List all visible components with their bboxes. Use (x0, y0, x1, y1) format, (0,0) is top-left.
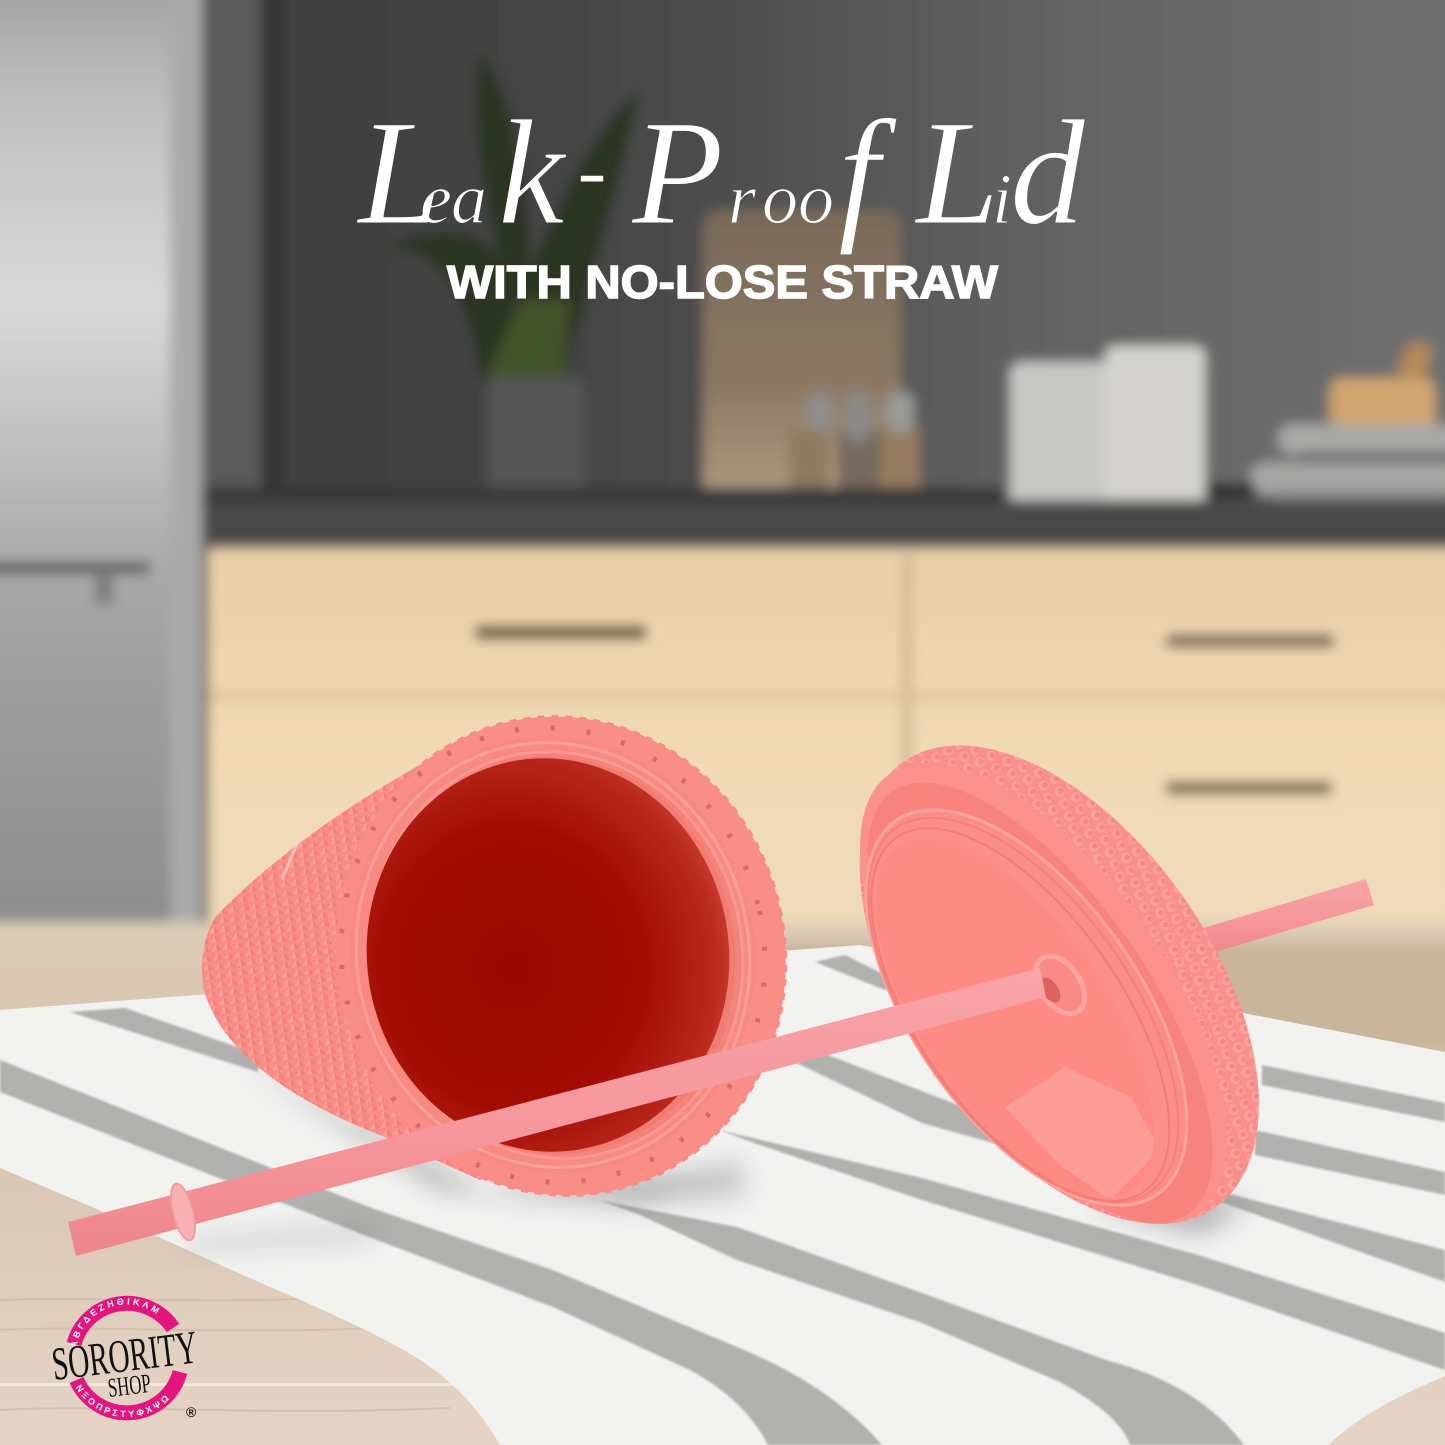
Sorority Shop logo (49, 1296, 200, 1420)
straw (68, 968, 1046, 1256)
straw collar (166, 1181, 200, 1243)
straw boss (1025, 947, 1095, 1023)
spice jars (790, 392, 920, 500)
title script: - (577, 121, 607, 220)
cup body with stud texture (202, 724, 700, 1180)
lid inner face (823, 795, 1207, 1241)
title script: L (356, 90, 441, 256)
greek letters top: ΑΒΓΔΕΖΗΘΙΚΛΜ (70, 1298, 160, 1346)
title script: k (498, 90, 567, 256)
mortar (1395, 342, 1432, 380)
title script: r (728, 159, 757, 239)
title script: o (762, 159, 798, 239)
table edge and wood grain (0, 1298, 490, 1411)
subtitle: WITH NO-LOSE STRAW (447, 256, 999, 308)
title script: e (420, 159, 452, 239)
tumbler cup (202, 675, 830, 1237)
rim dots (299, 688, 807, 1222)
Sorority Shop logo: SHOP (106, 1368, 152, 1403)
threads (803, 756, 1250, 1259)
title script: d (1010, 90, 1086, 256)
table (0, 922, 1445, 1445)
knurled outer band (779, 675, 1340, 1295)
cup interior (341, 735, 755, 1175)
light patch on lid face (1005, 1067, 1160, 1200)
straw hole (1035, 974, 1065, 1006)
wall (200, 0, 1445, 510)
gray stripes (0, 955, 1445, 1445)
greek letters bottom: ΝΞΟΠΡΣΤΥΦΧΨΩ (76, 1384, 170, 1417)
cutting board (703, 210, 901, 500)
cup rim (292, 675, 830, 1237)
counter (204, 500, 1445, 550)
faint logo on cup (282, 820, 310, 880)
logo ring (74, 1303, 173, 1344)
fridge (0, 0, 172, 925)
logo wordmark: SORORITY (49, 1322, 200, 1391)
striped tablecloth (0, 945, 1445, 1445)
lid (860, 746, 1259, 1224)
straw far end (1197, 879, 1374, 955)
lid rim (790, 704, 1297, 1283)
cabinet (208, 548, 1445, 948)
title script: o (798, 159, 834, 239)
title script: i (992, 159, 1012, 239)
threads (332, 717, 780, 1193)
title script: a (451, 159, 487, 239)
title script: f (838, 90, 897, 256)
title script: P (631, 90, 724, 256)
plates (1278, 424, 1445, 454)
canisters (1010, 362, 1110, 508)
registered mark: ® (186, 1404, 197, 1420)
contact shadows (184, 1060, 1250, 1250)
title script: L (914, 90, 999, 256)
plant (380, 50, 640, 380)
